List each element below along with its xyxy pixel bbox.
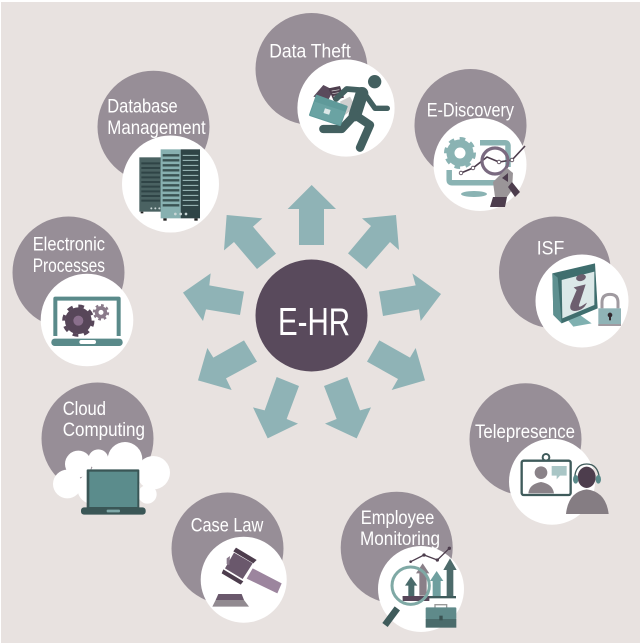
panel: Employee Monitoring: Monitoring <box>360 528 440 550</box>
icon: laptop on cloud <box>53 442 170 515</box>
panel: E-Discovery <box>414 69 526 211</box>
panel: Telepresence: Telepresence <box>475 421 575 443</box>
panel: E-Discovery: E-Discovery <box>427 100 514 122</box>
center hub: E-HR: E-HR <box>278 301 350 344</box>
arrows radiating from center <box>183 185 441 438</box>
icon: server racks <box>139 149 200 221</box>
icon: information monitor and padlock <box>552 263 621 327</box>
center hub: E-HR <box>256 260 368 372</box>
panel: ISF: ISF <box>537 237 564 259</box>
icon: gavel <box>212 548 282 607</box>
icon: growth chart, magnifier and briefcase <box>385 547 457 628</box>
panel: ISF <box>499 216 628 348</box>
icon: video call with headset user <box>522 454 609 514</box>
icon: laptop with gears <box>51 299 123 346</box>
icon: gear, monitor and magnifier <box>446 138 525 207</box>
panel: Employee Monitoring <box>341 492 464 632</box>
panel: Electronic Processes <box>12 216 133 366</box>
panel: Database Management: Management <box>107 117 206 139</box>
panel: Database Management: Database <box>107 96 178 118</box>
panel: Telepresence <box>470 383 609 525</box>
panel: Electronic Processes: Electronic <box>33 234 105 256</box>
panel: Data Theft <box>256 13 395 157</box>
panel: Case Law: Case Law <box>191 515 264 537</box>
panel: Cloud Computing: Cloud <box>63 398 106 420</box>
panel: Cloud Computing <box>42 382 170 515</box>
panel: Case Law <box>172 492 287 623</box>
panel: Cloud Computing: Computing <box>63 419 145 441</box>
icon: running man with briefcase <box>310 75 387 148</box>
panel: Database Management <box>98 71 219 232</box>
panel: Electronic Processes: Processes <box>33 255 105 277</box>
panel: Employee Monitoring: Employee <box>361 507 434 529</box>
panel: Data Theft: Data Theft <box>269 40 351 62</box>
